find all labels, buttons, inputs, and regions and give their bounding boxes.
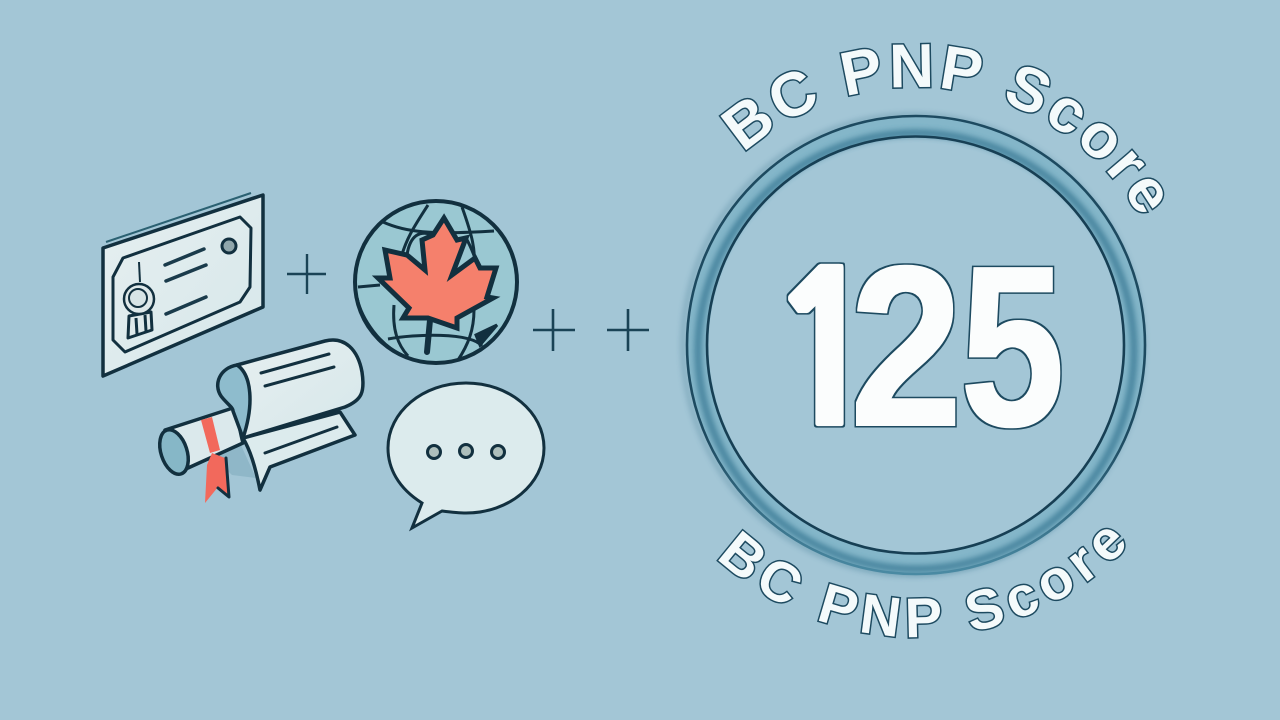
score number 125: 1 [768, 247, 883, 456]
icon: certificate [103, 193, 263, 376]
icon: globe with maple leaf [355, 201, 517, 363]
icon: plus two [533, 309, 575, 351]
icon: diploma scroll [155, 340, 363, 503]
icon: plus three [607, 309, 649, 351]
curved heading bottom: BC PNP Score [716, 528, 1126, 639]
icon: maple leaf [378, 218, 496, 328]
curved heading top: BC PNP Score [718, 42, 1164, 214]
score ring [683, 115, 1145, 575]
score number 125: 5 [960, 219, 1064, 474]
icon: plus one [287, 254, 326, 294]
icon: speech bubble [388, 383, 544, 528]
score number 125: 2 [850, 219, 962, 474]
score number 125 [768, 219, 1064, 474]
